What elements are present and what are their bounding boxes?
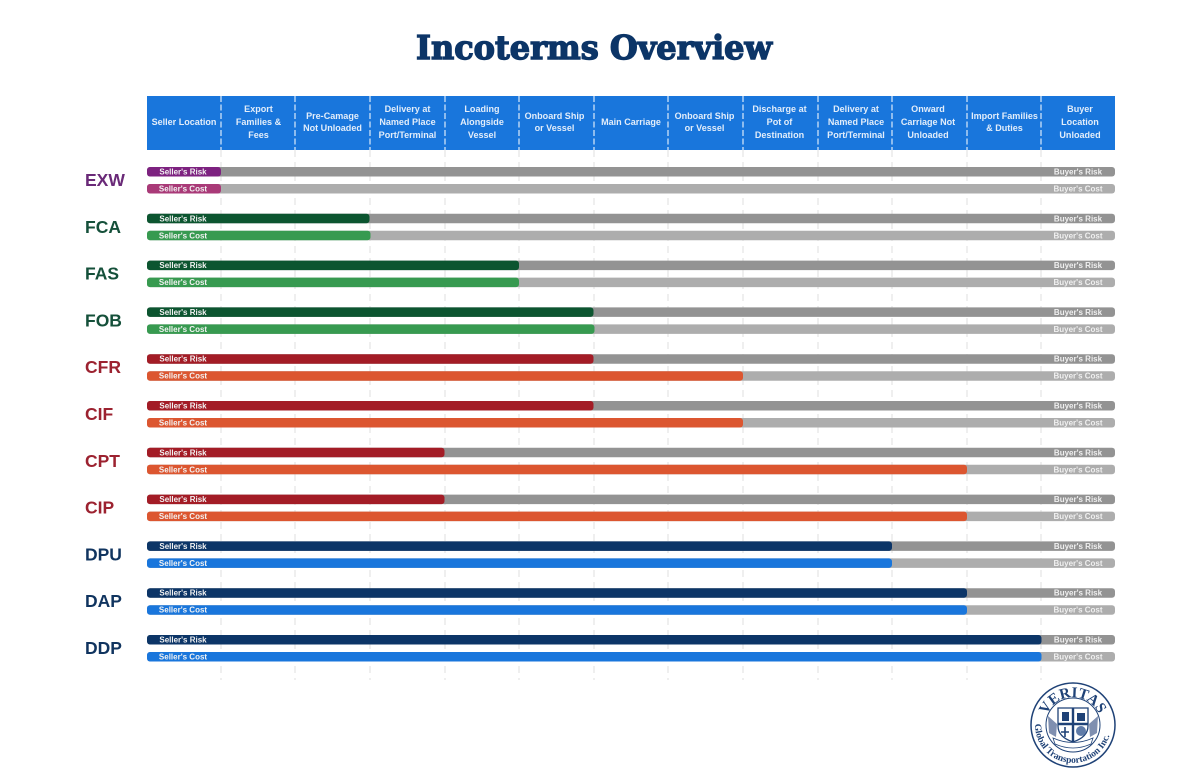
row: CPT: Seller's Cost xyxy=(159,465,207,474)
row: CFR: CFR xyxy=(85,357,121,377)
row: CFR: Buyer's Cost xyxy=(1053,372,1103,381)
header band: Export xyxy=(244,104,273,114)
header band: & Duties xyxy=(986,123,1023,133)
header band: Discharge at xyxy=(752,104,807,114)
logo: Veritas seal: VERITAS xyxy=(1038,687,1106,712)
column grid lines xyxy=(221,150,1041,680)
row: DPU xyxy=(85,541,1115,568)
row: FCA xyxy=(85,214,1115,240)
header band: Carriage Not xyxy=(901,117,955,127)
row: CIP: Seller's Risk xyxy=(159,495,207,504)
row: DAP: Seller's Risk xyxy=(159,589,207,598)
row: EXW: Seller's Cost xyxy=(159,184,207,194)
row: FCA: Seller's Cost xyxy=(159,231,207,240)
row: DPU: DPU xyxy=(85,544,122,564)
row: CIF xyxy=(85,401,1115,428)
row: DDP: Seller's Risk xyxy=(159,636,207,644)
row: DAP: Seller's Cost xyxy=(159,606,207,615)
row: CPT: Buyer's Cost xyxy=(1053,465,1103,474)
row: FAS: Seller's Cost xyxy=(159,278,207,287)
row: FOB: Buyer's Risk xyxy=(1054,308,1103,317)
row: DDP: Buyer's Risk xyxy=(1054,636,1103,644)
header band: Location xyxy=(1061,117,1099,127)
header band: Loading xyxy=(464,104,500,114)
row: DPU: Seller's Cost xyxy=(159,559,207,568)
row: EXW: Buyer's Risk xyxy=(1054,168,1103,176)
header band: Onward xyxy=(911,104,945,114)
row: EXW: Buyer's Cost xyxy=(1053,184,1103,194)
header band: Buyer xyxy=(1067,104,1093,114)
row: DDP: Buyer's Cost xyxy=(1053,652,1103,662)
row: CPT: CPT xyxy=(85,451,120,471)
row: DDP: Seller's Cost xyxy=(159,652,207,662)
header band: Named Place xyxy=(379,117,436,127)
row: FOB: FOB xyxy=(85,310,122,330)
row: FOB: Seller's Risk xyxy=(159,308,207,317)
row: DPU: Seller's Risk xyxy=(159,542,207,551)
header band: Port/Terminal xyxy=(827,130,885,140)
row: FCA: Buyer's Risk xyxy=(1054,214,1103,223)
header band: Not Unloaded xyxy=(303,123,362,133)
logo: Veritas seal: Global Transportation Inc. xyxy=(1035,724,1110,765)
header band: Delivery at xyxy=(833,104,879,114)
row: CIP: Seller's Cost xyxy=(159,512,207,521)
header band: Port/Terminal xyxy=(379,130,436,140)
header band: Onboard Ship xyxy=(525,111,585,121)
row: DAP xyxy=(85,588,1115,615)
row: DAP: DAP xyxy=(85,591,122,611)
logo: Veritas seal xyxy=(1030,682,1116,768)
header band: Fees xyxy=(248,130,269,140)
row: DAP: Buyer's Risk xyxy=(1054,589,1103,598)
row: DPU: Buyer's Cost xyxy=(1053,559,1103,568)
header band: Destination xyxy=(755,130,804,140)
row: CIF: Buyer's Risk xyxy=(1054,402,1103,410)
row: CFR: Seller's Cost xyxy=(159,372,207,381)
row: CIF: Buyer's Cost xyxy=(1053,418,1103,428)
header band: or Vessel xyxy=(535,123,574,133)
row: CFR: Buyer's Risk xyxy=(1054,355,1103,364)
row: EXW: Seller's Risk xyxy=(159,168,207,176)
row: FOB: Seller's Cost xyxy=(159,325,207,334)
header band xyxy=(147,96,1115,150)
row: FAS: Buyer's Cost xyxy=(1053,278,1103,287)
row: EXW: EXW xyxy=(85,170,125,190)
header band: Onboard Ship xyxy=(675,111,735,121)
header band: Families & xyxy=(236,117,282,127)
row: FCA: Seller's Risk xyxy=(159,214,207,223)
row: FAS xyxy=(85,261,1115,287)
row: CFR xyxy=(85,354,1115,381)
row: DDP: DDP xyxy=(85,638,122,658)
header band: Seller Location xyxy=(152,117,216,127)
header band: Pre-Camage xyxy=(306,111,359,121)
header band: or Vessel xyxy=(685,123,724,133)
row: DAP: Buyer's Cost xyxy=(1053,606,1103,615)
row: CIP xyxy=(85,495,1115,521)
row: EXW xyxy=(85,167,1115,194)
header band: Vessel xyxy=(468,130,496,140)
row: CFR: Seller's Risk xyxy=(159,355,207,364)
row: FCA: FCA xyxy=(85,217,121,237)
header band: Main Carriage xyxy=(601,117,661,127)
row: CIP: Buyer's Risk xyxy=(1054,495,1103,504)
row: CIP: Buyer's Cost xyxy=(1053,512,1103,521)
row: DDP xyxy=(85,635,1115,662)
row: FCA: Buyer's Cost xyxy=(1053,231,1103,240)
row: FAS: Buyer's Risk xyxy=(1054,261,1103,270)
row: CPT: Buyer's Risk xyxy=(1054,448,1103,457)
header band: Unloaded xyxy=(907,130,949,140)
row: CIP: CIP xyxy=(85,498,114,518)
header band: Import Families xyxy=(971,111,1038,121)
row: CIF: Seller's Risk xyxy=(159,402,207,410)
row: DPU: Buyer's Risk xyxy=(1054,542,1103,551)
header band: Unloaded xyxy=(1059,130,1101,140)
row: FAS: FAS xyxy=(85,264,119,284)
header band: Delivery at xyxy=(385,104,430,114)
row: FAS: Seller's Risk xyxy=(159,261,207,270)
row: FOB xyxy=(85,307,1115,334)
header band: Named Place xyxy=(828,117,884,127)
row: CPT: Seller's Risk xyxy=(159,448,207,457)
title: Incoterms Overview xyxy=(416,28,774,67)
header band: Pot of xyxy=(767,117,793,127)
row: CIF: Seller's Cost xyxy=(159,418,207,428)
row: CIF: CIF xyxy=(85,404,114,424)
row: CPT xyxy=(85,448,1115,474)
row: FOB: Buyer's Cost xyxy=(1053,325,1103,334)
header band: Alongside xyxy=(460,117,504,127)
